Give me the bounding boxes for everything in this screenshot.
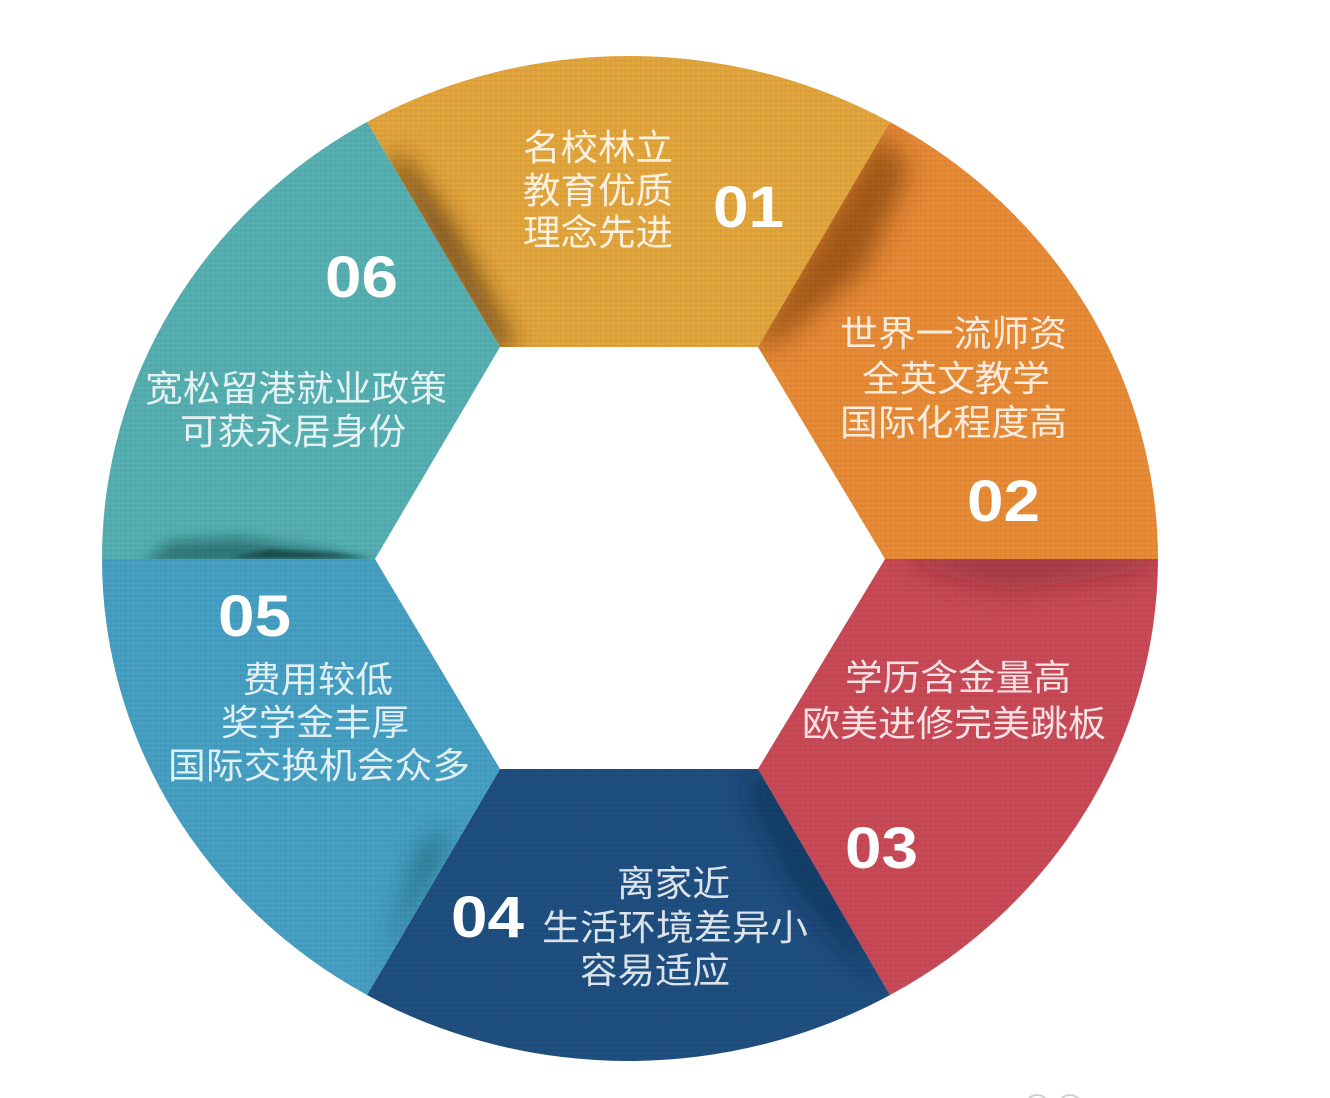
text: segment 06: 可获永居身份 [180,411,406,452]
panel: segment 04 [367,765,890,1061]
text: segment 01: 名校林立 [523,127,673,168]
number 05: 05 [218,584,291,649]
number 04: 04 [451,885,524,950]
text: segment 03: 学历含金量高 [845,657,1071,698]
text: segment 01: 理念先进 [523,212,673,253]
text: segment 02: 国际化程度高 [840,402,1067,443]
text: segment 04: 离家近 [617,863,730,904]
text: segment 02 [840,313,1067,443]
text: segment 05: 费用较低 [243,659,393,700]
number 02: 02 [967,469,1040,534]
number 06: 06 [325,245,398,310]
panel: segment 01 [367,56,890,350]
ring chart [102,56,1160,1061]
panel: segment 03 [758,550,1160,995]
text: segment 05 [168,659,470,786]
text: segment 04: 容易适应 [580,950,730,991]
text: segment 01 [523,127,673,253]
text: segment 05: 奖学金丰厚 [221,702,409,743]
text: segment 03 [802,657,1106,744]
number 03: 03 [845,816,918,881]
text: segment 06 [145,368,447,452]
text: segment 02: 全英文教学 [862,358,1050,399]
text: segment 01: 教育优质 [523,170,673,211]
watermark fragment [1025,1095,1082,1098]
panel: segment 06 [102,122,500,565]
text: segment 04: 生活环境差异小 [542,907,808,948]
number 01: 01 [713,175,784,240]
text: segment 03: 欧美进修完美跳板 [802,703,1106,744]
text: segment 02: 世界一流师资 [840,313,1067,354]
text: segment 04 [542,863,808,991]
panel: segment 02 [750,122,1158,559]
text: segment 05: 国际交换机会众多 [168,745,470,786]
text: segment 06: 宽松留港就业政策 [145,368,447,409]
panel: segment 05 [102,559,500,995]
